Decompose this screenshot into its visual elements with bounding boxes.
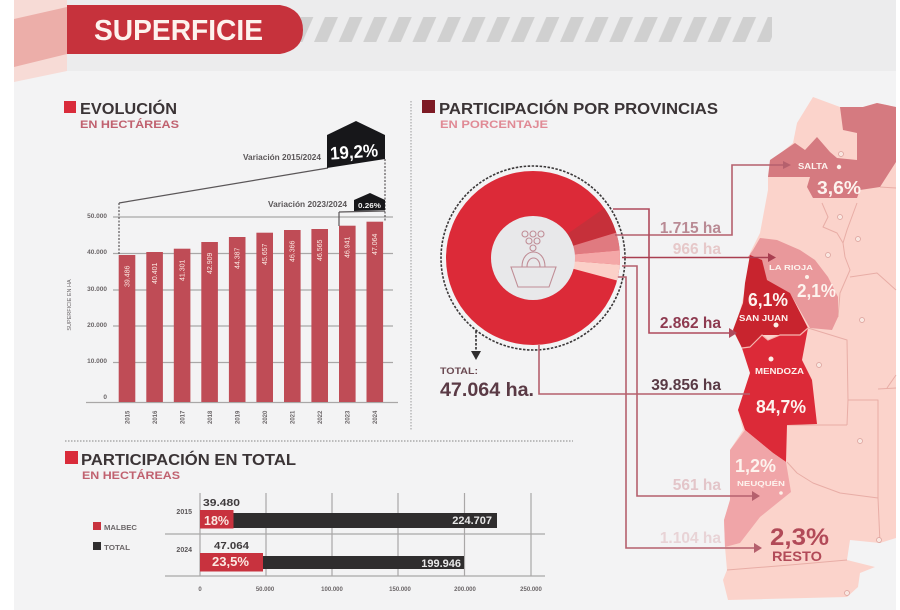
stacked bar chart: participación bbox=[165, 493, 545, 593]
arrow: total bbox=[471, 331, 481, 360]
stacked bar chart: participación: 150.000 bbox=[389, 587, 412, 593]
stacked bar chart: participación: 47.064 bbox=[214, 540, 249, 552]
stacked bar chart: participación: 50.000 bbox=[256, 587, 275, 593]
heading: evolución: EVOLUCIÓN bbox=[80, 100, 177, 118]
province labels: LA RIOJA bbox=[769, 263, 814, 272]
province labels: 2,1% bbox=[797, 281, 836, 301]
stacked bar chart: participación: 100.000 bbox=[321, 587, 344, 593]
bar chart: evolución: SUPERFICIE EN HA bbox=[67, 279, 73, 331]
stacked bar chart: participación: 224.707 bbox=[452, 515, 492, 527]
total label: TOTAL: bbox=[440, 366, 478, 377]
header ribbon fold bbox=[14, 0, 67, 82]
bar chart: evolución: 2021 bbox=[291, 410, 297, 424]
bar chart: evolución: 46.565 bbox=[317, 239, 324, 261]
heading: participación en total: PARTICIPACIÓN EN TOTAL bbox=[81, 450, 296, 469]
arrow: san juan bbox=[613, 209, 737, 338]
province labels: 84,7% bbox=[756, 397, 806, 417]
callout: variación 2023/2024: 0.26% bbox=[358, 201, 381, 210]
province labels: 2,3% bbox=[770, 524, 829, 551]
bar chart: evolución: 47.064 bbox=[372, 233, 379, 255]
bar chart: evolución: 50.000 bbox=[87, 213, 107, 220]
heading: evolución bbox=[64, 100, 179, 131]
callout: variación 2015/2024: Variación 2015/2024 bbox=[243, 153, 322, 162]
heading: participación en total: EN HECTÁREAS bbox=[82, 469, 180, 482]
stacked bar chart: participación: 39.480 bbox=[203, 497, 240, 509]
bar chart: evolución: 20.000 bbox=[87, 322, 107, 329]
bar chart: evolución: 46.366 bbox=[290, 240, 297, 262]
province labels bbox=[735, 162, 861, 564]
stacked bar chart: participación: 199.946 bbox=[421, 558, 461, 570]
callout: variación 2023/2024: Variación 2023/2024 bbox=[268, 200, 348, 209]
stacked bar chart: participación: 200.000 bbox=[454, 587, 476, 593]
hectare labels bbox=[651, 220, 721, 547]
bar chart: evolución: 2022 bbox=[318, 410, 324, 424]
bar chart: evolución: 30.000 bbox=[87, 286, 107, 293]
legend: TOTAL bbox=[104, 545, 131, 552]
heading: participación por provincias: EN PORCENTAJE bbox=[440, 119, 548, 131]
title banner bbox=[67, 5, 303, 54]
bar chart: evolución bbox=[67, 213, 398, 424]
header stripes bbox=[290, 17, 772, 42]
total label: 47.064 ha. bbox=[440, 380, 534, 401]
hectare labels: 39.856 ha bbox=[651, 377, 721, 394]
arrow: salta bbox=[615, 161, 791, 235]
bar chart: evolución: 42.909 bbox=[207, 252, 214, 274]
arrow: la rioja bbox=[622, 253, 776, 262]
total label bbox=[440, 366, 534, 401]
stacked bar chart: participación: 2015 bbox=[176, 509, 192, 516]
province labels: SALTA bbox=[798, 162, 828, 171]
bar chart: evolución: 41.301 bbox=[180, 259, 186, 281]
bar chart: evolución: 39.486 bbox=[124, 265, 132, 287]
bar chart: evolución: 2016 bbox=[153, 410, 159, 424]
arrow: neuquén bbox=[622, 266, 760, 501]
icon: grapes and basket bbox=[511, 231, 556, 287]
bar chart: evolución: 46.941 bbox=[345, 236, 352, 258]
bar chart: evolución: 2018 bbox=[208, 410, 214, 424]
bar chart: evolución: 0 bbox=[103, 394, 107, 401]
donut chart bbox=[441, 166, 625, 350]
stacked bar chart: participación: 250.000 bbox=[520, 587, 542, 593]
hectare labels: 966 ha bbox=[673, 241, 721, 258]
stacked bar chart: participación: 23,5% bbox=[212, 554, 249, 569]
callout: variación 2023/2024 bbox=[268, 193, 385, 226]
province labels: NEUQUÉN bbox=[737, 479, 785, 488]
province labels: SAN JUAN bbox=[739, 314, 788, 323]
bar chart: evolución: 2020 bbox=[263, 410, 269, 424]
bar chart: evolución: 2015 bbox=[126, 410, 132, 424]
stacked bar chart: participación: 0 bbox=[198, 587, 202, 593]
callout: variación 2015/2024: 19,2% bbox=[329, 140, 379, 164]
bar chart: evolución: 10.000 bbox=[87, 358, 107, 365]
hectare labels: 561 ha bbox=[673, 477, 721, 494]
bar chart: evolución: 40.401 bbox=[152, 262, 159, 284]
heading: evolución: EN HECTÁREAS bbox=[80, 118, 179, 131]
province labels: 3,6% bbox=[817, 178, 861, 198]
hectare labels: 1.715 ha bbox=[660, 220, 721, 237]
heading: participación en total bbox=[65, 450, 296, 482]
stacked bar chart: participación: 18% bbox=[204, 513, 229, 528]
bar chart: evolución: 2017 bbox=[180, 410, 186, 424]
arrow: resto bbox=[618, 277, 762, 553]
bar chart: evolución: 2024 bbox=[373, 410, 379, 424]
province labels: 6,1% bbox=[748, 290, 788, 310]
callout: variación 2015/2024 bbox=[119, 121, 385, 255]
stacked bar chart: participación: 2024 bbox=[176, 547, 192, 554]
heading: participación por provincias bbox=[422, 99, 718, 131]
bar chart: evolución: 2019 bbox=[236, 410, 242, 424]
map of provinces bbox=[723, 97, 896, 600]
bar chart: evolución: 2023 bbox=[346, 410, 352, 424]
hectare labels: 1.104 ha bbox=[660, 530, 721, 547]
heading: participación por provincias: PARTICIPACIÓN POR PROVINCIAS bbox=[439, 99, 718, 118]
hectare labels: 2.862 ha bbox=[660, 315, 721, 332]
legend: MALBEC bbox=[104, 525, 137, 532]
bar chart: evolución: 40.000 bbox=[87, 249, 107, 256]
legend bbox=[93, 522, 137, 552]
province labels: 1,2% bbox=[735, 456, 776, 476]
province labels: MENDOZA bbox=[755, 367, 804, 376]
bar chart: evolución: 44.387 bbox=[235, 247, 242, 269]
arrow: mendoza bbox=[539, 345, 750, 394]
province labels: RESTO bbox=[772, 548, 822, 564]
bar chart: evolución: 45.657 bbox=[262, 243, 269, 265]
title banner: SUPERFICIE bbox=[94, 15, 263, 47]
